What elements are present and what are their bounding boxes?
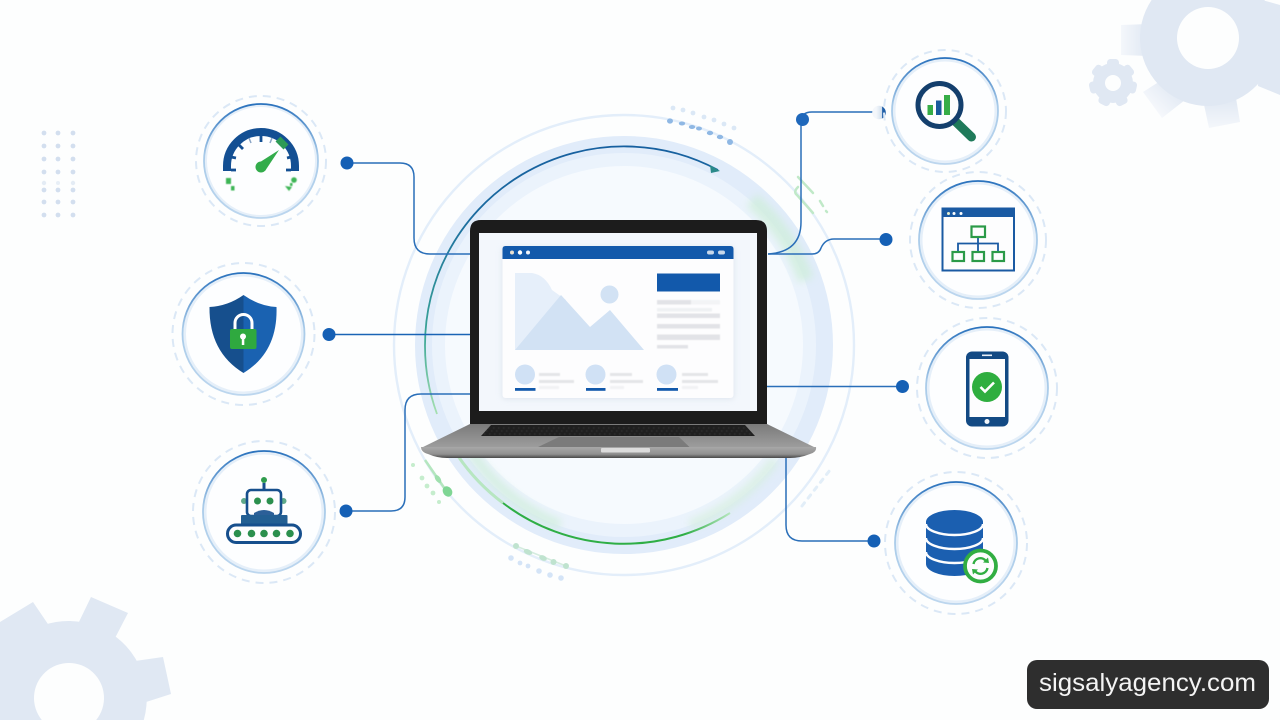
connector: shield	[322, 328, 470, 341]
connector: database	[786, 458, 880, 548]
gear: top right large	[1121, 0, 1280, 128]
arc: blue to green	[425, 146, 718, 414]
arc: green	[503, 503, 730, 544]
text lines	[657, 300, 720, 348]
website badge	[1027, 660, 1269, 709]
gear: bottom left	[0, 597, 171, 720]
icon: magnifier chart	[884, 50, 1006, 172]
base front	[421, 447, 816, 458]
website badge: sigsalyagency.com	[1039, 669, 1256, 697]
icon: phone check	[917, 318, 1057, 458]
accent dots: bottom	[508, 543, 569, 581]
laptop	[421, 220, 816, 458]
connector: sitemap	[768, 233, 892, 254]
central rings	[394, 115, 854, 575]
icon: sitemap window	[910, 172, 1046, 308]
laptop lid	[470, 220, 767, 424]
dot grid	[42, 131, 75, 217]
connector: robot	[340, 394, 470, 518]
gear: top right small	[1088, 59, 1138, 107]
arc tip	[710, 165, 720, 173]
keyboard	[481, 425, 755, 436]
accent dots: lower left green	[411, 460, 454, 504]
icon: database sync	[885, 472, 1027, 614]
accent dots: top right green	[795, 177, 827, 213]
trackpad	[537, 437, 690, 448]
arc: pale green	[458, 456, 503, 503]
connector: gauge	[340, 156, 470, 254]
laptop screen	[479, 233, 757, 411]
feature cards	[515, 364, 676, 384]
accent dots: lower right	[802, 470, 830, 506]
accent dots: top blue	[667, 106, 736, 145]
image placeholder	[515, 273, 644, 350]
icon: shield	[172, 263, 314, 405]
laptop base	[421, 424, 816, 448]
browser window	[502, 246, 734, 399]
icon: speedometer	[196, 96, 326, 226]
connector: search	[768, 106, 886, 254]
blue button	[657, 274, 720, 292]
connector: phone	[767, 380, 909, 393]
icon: robot	[193, 441, 335, 583]
